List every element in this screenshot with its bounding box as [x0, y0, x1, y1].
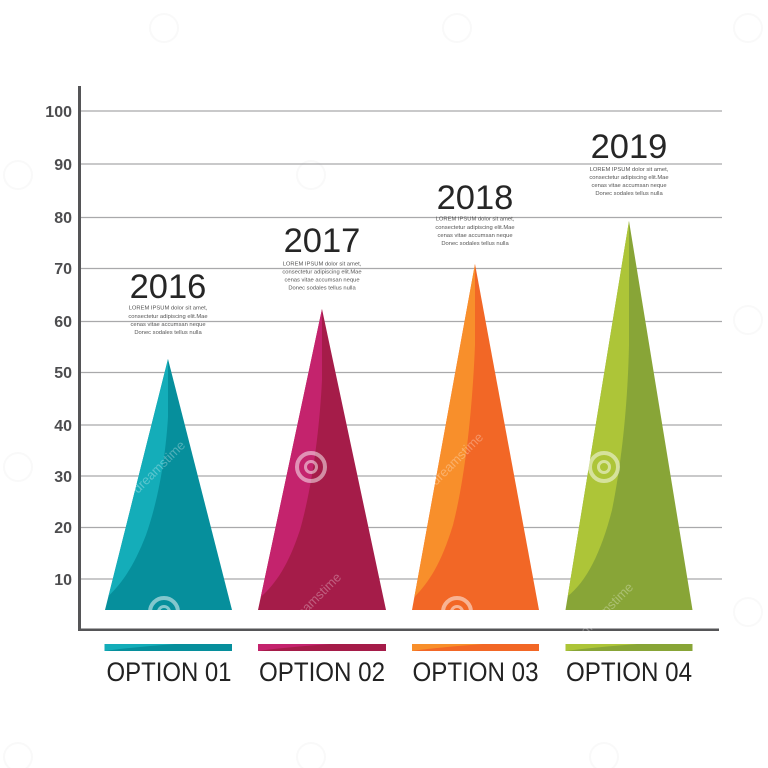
watermark spirals — [130, 430, 636, 638]
watermark spirals: dreamstime — [286, 570, 344, 628]
heading 2016: Donec sodales tellus nulla — [134, 330, 202, 336]
heading 2019: Donec sodales tellus nulla — [595, 191, 663, 197]
legend option 01 — [104, 644, 232, 687]
heading 2017: consectetur adipiscing elit.Mae — [282, 270, 362, 276]
heading 2019: consectetur adipiscing elit.Mae — [589, 175, 669, 181]
heading 2016 — [128, 268, 208, 336]
heading 2017 — [282, 222, 362, 292]
legend option 03: OPTION 03 — [412, 657, 538, 687]
chart axes — [78, 86, 719, 631]
y axis labels: 60 — [54, 314, 72, 331]
legend option 03 — [412, 644, 539, 687]
heading 2017: 2017 — [284, 222, 360, 260]
triangle 2018 — [412, 264, 539, 610]
watermark spirals: dreamstime — [578, 580, 636, 638]
triangle 2017 — [258, 309, 386, 610]
y axis labels: 90 — [54, 157, 72, 174]
y axis labels: 10 — [54, 572, 72, 589]
grid lines — [81, 111, 722, 579]
y axis labels: 30 — [54, 469, 72, 486]
watermark spirals: dreamstime — [428, 430, 486, 488]
heading 2019: cenas vitae accumsan neque — [591, 183, 667, 189]
triangle 2016 — [105, 359, 232, 610]
heading 2019: LOREM IPSUM dolor sit amet, — [590, 167, 669, 173]
watermark spirals: dreamstime — [130, 438, 188, 496]
heading 2017: cenas vitae accumsan neque — [284, 278, 360, 284]
heading 2018: cenas vitae accumsan neque — [437, 233, 513, 239]
triangle 2019 — [566, 221, 692, 610]
heading 2016: LOREM IPSUM dolor sit amet, — [129, 306, 208, 312]
legend option 01: OPTION 01 — [106, 657, 232, 687]
heading 2019: 2019 — [591, 128, 667, 166]
legend option 04: OPTION 04 — [566, 657, 692, 687]
y axis labels: 70 — [54, 261, 72, 278]
y axis labels: 100 — [45, 104, 72, 121]
heading 2016: 2016 — [130, 268, 206, 306]
y axis labels: 80 — [54, 210, 72, 227]
heading 2018 — [435, 179, 515, 247]
heading 2018: LOREM IPSUM dolor sit amet, — [436, 216, 515, 222]
y axis labels — [45, 104, 72, 589]
y axis labels: 40 — [54, 418, 72, 435]
y axis labels: 20 — [54, 520, 72, 537]
legend option 04 — [566, 644, 692, 687]
heading 2016: consectetur adipiscing elit.Mae — [128, 314, 208, 320]
heading 2017: LOREM IPSUM dolor sit amet, — [283, 262, 362, 268]
heading 2019 — [589, 128, 669, 197]
heading 2017: Donec sodales tellus nulla — [288, 286, 356, 292]
legend option 02 — [258, 644, 386, 687]
heading 2016: cenas vitae accumsan neque — [130, 322, 206, 328]
heading 2018: Donec sodales tellus nulla — [441, 241, 509, 247]
y axis labels: 50 — [54, 365, 72, 382]
heading 2018: 2018 — [437, 179, 513, 217]
legend option 02: OPTION 02 — [259, 657, 385, 687]
heading 2018: consectetur adipiscing elit.Mae — [435, 225, 515, 231]
